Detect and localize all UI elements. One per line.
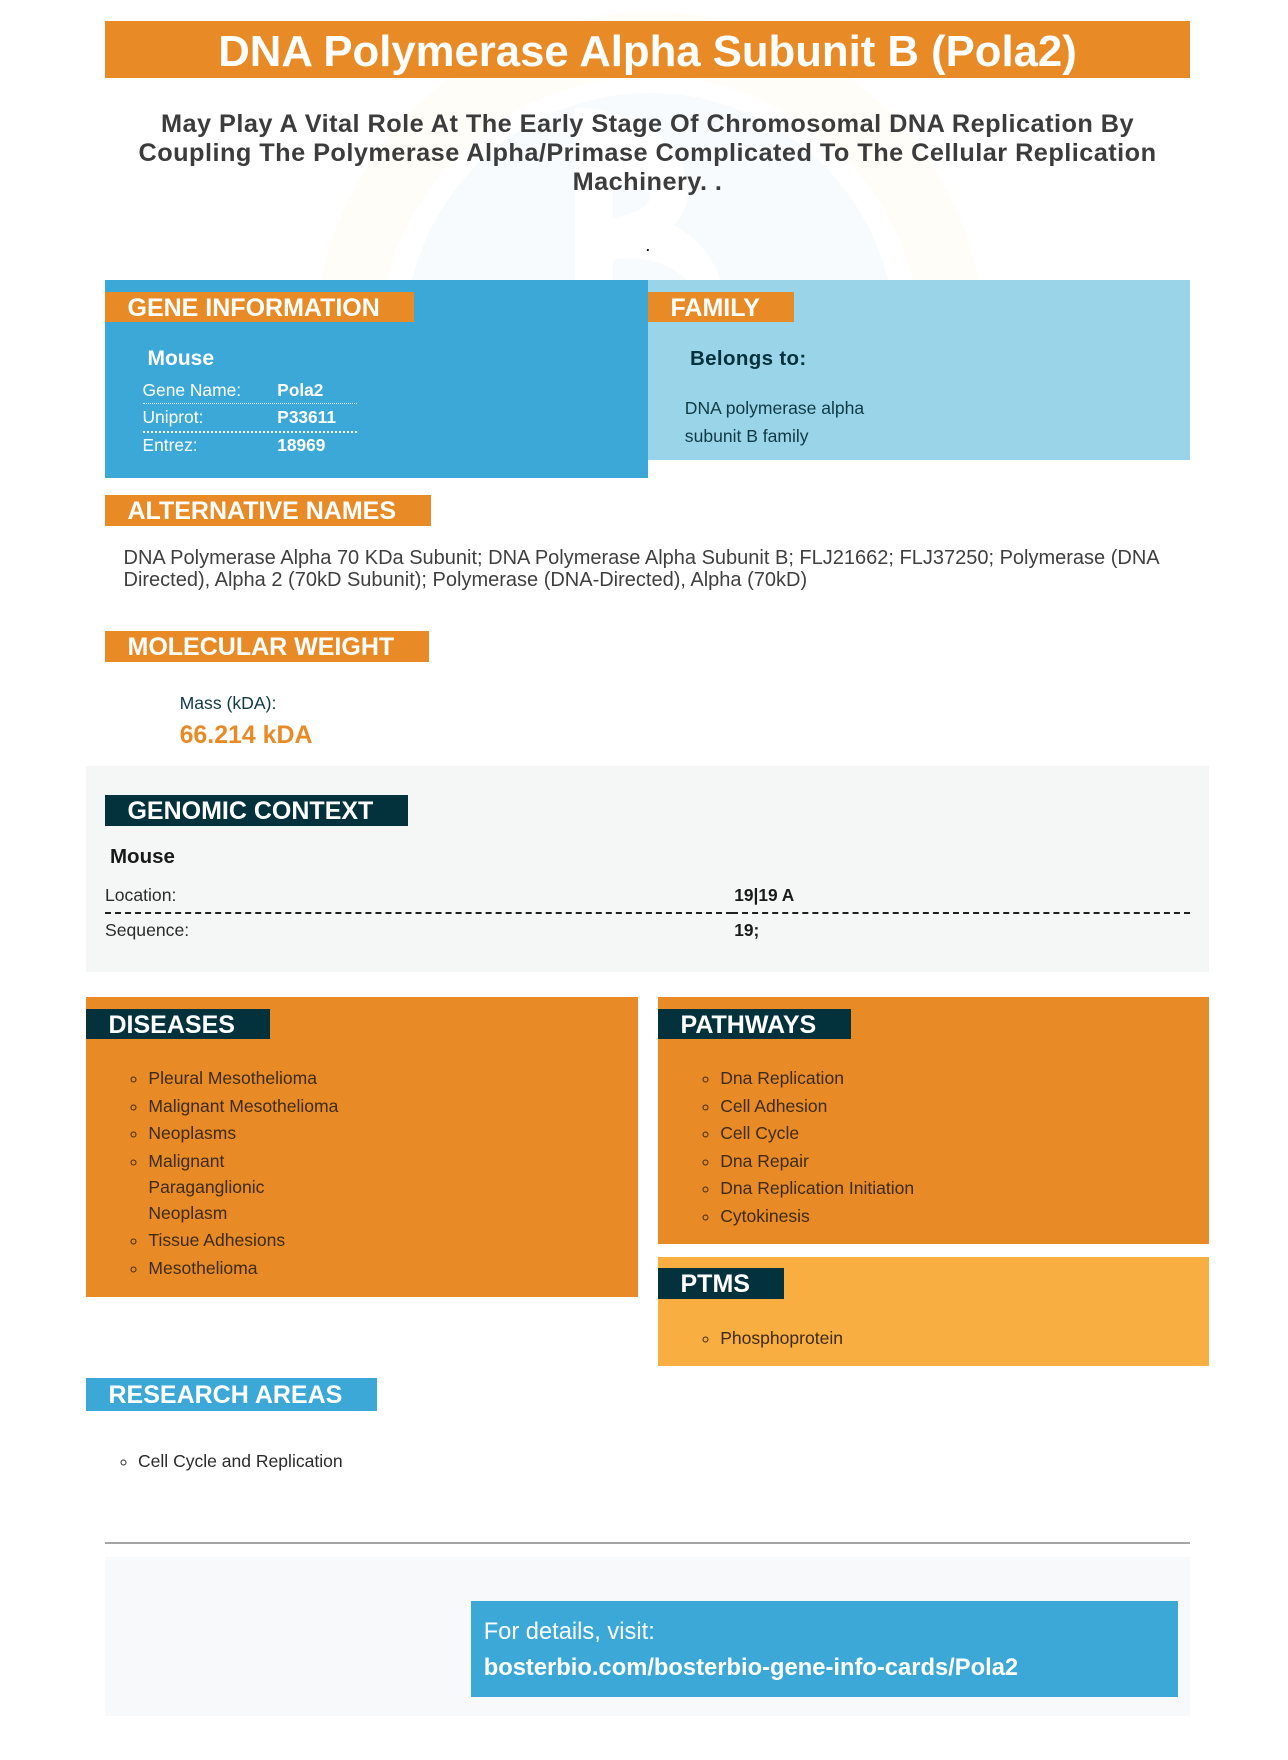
entrez row: Entrez: (142, 435, 198, 455)
location value: 19|19 A (734, 885, 794, 905)
heading: ptms (658, 1268, 784, 1299)
heading: pathways: PATHWAYS (680, 1011, 816, 1039)
heading: research areas (86, 1378, 377, 1411)
diseases list: Neoplasm (148, 1203, 227, 1223)
mass label: Mass (kDA): (180, 693, 276, 713)
species: mouse: Mouse (110, 845, 175, 868)
title banner: DNA Polymerase Alpha Subunit B (Pola2) (218, 27, 1077, 76)
heading: research areas: RESEARCH AREAS (108, 1381, 342, 1409)
belongs to label: Belongs to: (690, 347, 807, 370)
diseases list: Malignant (148, 1151, 224, 1171)
diseases list (130, 1068, 338, 1278)
pathways list: Cell Adhesion (720, 1096, 827, 1116)
diseases list: Mesothelioma (148, 1258, 258, 1278)
uniprot value: P33611 (277, 407, 336, 427)
sequence label: Sequence: (105, 920, 189, 940)
gene name row: Gene Name: (142, 380, 241, 400)
panel: genomic context (86, 766, 1209, 972)
uniprot row: Uniprot: (142, 407, 203, 427)
callout url: bosterbio.com/bosterbio-gene-info-cards/Pola2 (484, 1654, 1018, 1681)
heading: molecular weight: MOLECULAR WEIGHT (128, 633, 394, 661)
subtitle: Coupling The Polymerase Alpha/Primase Complicated To The Cellular Replication (138, 139, 1156, 167)
heading: genomic context: GENOMIC CONTEXT (127, 797, 373, 825)
family text: subunit B family (685, 426, 809, 446)
pathways list: Cell Cycle (720, 1123, 799, 1143)
species: mouse: Mouse (148, 347, 214, 370)
alternative names text: DNA Polymerase Alpha 70 KDa Subunit; DNA Polymerase Alpha Subunit B; FLJ21662; FLJ37250; Polymerase (DNA (124, 547, 1160, 569)
diseases list: Paraganglionic (148, 1177, 264, 1197)
heading: alternative names: ALTERNATIVE NAMES (128, 497, 396, 525)
diseases list: Pleural Mesothelioma (148, 1068, 317, 1088)
small dot: . (646, 239, 650, 254)
heading: diseases (86, 1009, 270, 1039)
diseases list: Tissue Adhesions (148, 1230, 285, 1250)
family text (685, 398, 864, 446)
panel: family (648, 280, 1190, 460)
callout: details link (471, 1601, 1178, 1697)
panel: footer (105, 1557, 1190, 1716)
heading: ptms: PTMS (680, 1270, 750, 1298)
research areas list: Cell Cycle and Replication (138, 1451, 343, 1471)
location label: Location: (105, 885, 176, 905)
subtitle: May Play A Vital Role At The Early Stage Of Chromosomal DNA Replication By (161, 110, 1134, 138)
mass value: 66.214 kDA (180, 721, 312, 749)
heading: family: FAMILY (670, 294, 760, 322)
pathways list: Dna Replication Initiation (720, 1178, 914, 1198)
diseases list: Malignant Mesothelioma (148, 1096, 338, 1116)
sequence value: 19; (734, 920, 759, 940)
pathways list: Dna Replication (720, 1068, 844, 1088)
heading: gene information: GENE INFORMATION (128, 294, 380, 322)
pathways list: Cytokinesis (720, 1206, 810, 1226)
diseases list: Neoplasms (148, 1123, 236, 1143)
heading: diseases: DISEASES (108, 1011, 235, 1039)
subtitle (138, 110, 1156, 196)
family text: DNA polymerase alpha (685, 398, 864, 418)
entrez value: 18969 (277, 435, 325, 455)
alternative names text: Directed), Alpha 2 (70kD Subunit); Polymerase (DNA-Directed), Alpha (70kD) (124, 569, 807, 591)
callout label: For details, visit: (484, 1619, 655, 1645)
watermark logo (0, 0, 1288, 280)
panel: diseases (86, 997, 638, 1297)
pathways list: Dna Repair (720, 1151, 809, 1171)
heading: pathways (658, 1009, 851, 1039)
panel: gene information (105, 280, 648, 478)
alternative names text (124, 547, 1160, 591)
panel: pathways (658, 997, 1209, 1244)
subtitle: Machinery. . (573, 168, 722, 196)
ptms list: Phosphoprotein (720, 1328, 843, 1348)
heading: family (648, 292, 794, 322)
gene name value: Pola2 (277, 380, 323, 400)
panel: ptms (658, 1257, 1209, 1366)
pathways list (702, 1068, 914, 1226)
title banner (105, 21, 1190, 78)
